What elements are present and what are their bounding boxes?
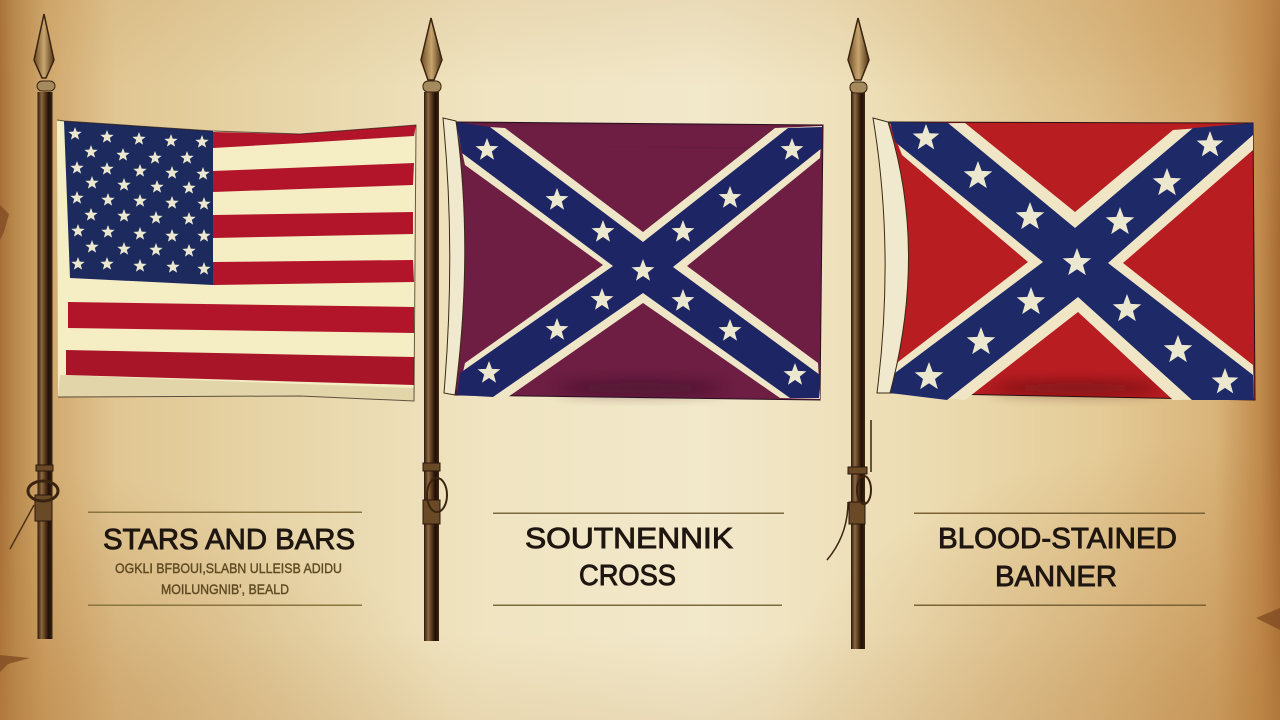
flagpole 2: [421, 18, 447, 641]
flag column: Blood-Stained Banner: [827, 18, 1255, 649]
caption: Stars and Bars: [88, 512, 362, 606]
saltire stars: [476, 138, 806, 385]
flag 2: maroon saltire: [443, 118, 823, 400]
flag 1: stars and stripes: [57, 120, 416, 401]
flagpole 1: [10, 14, 58, 639]
flag 3: red saltire: [873, 118, 1255, 400]
caption: Blood-Stained Banner: [914, 512, 1206, 606]
caption: Stars and Bars: STARS AND BARS: [103, 524, 355, 556]
canton stars: [68, 127, 211, 275]
caption: Blood-Stained Banner: BLOOD-STAINED: [938, 523, 1177, 555]
flag column: Southern Cross: [421, 18, 823, 641]
caption: Stars and Bars: MOILUNGNIB', BEALD: [161, 581, 289, 597]
flag column: Stars and Bars: [10, 14, 416, 639]
caption: Blood-Stained Banner: BANNER: [995, 561, 1117, 593]
caption: Southern Cross: [493, 512, 784, 606]
flagpole 3: [827, 18, 871, 649]
caption: Stars and Bars: OGKLI BFBOUI,SLABN ULLEISB ADIDU: [115, 560, 342, 576]
caption: Southern Cross: CROSS: [579, 560, 676, 592]
caption: Southern Cross: SOUTNENNIK: [525, 523, 734, 555]
saltire stars: [913, 124, 1238, 393]
